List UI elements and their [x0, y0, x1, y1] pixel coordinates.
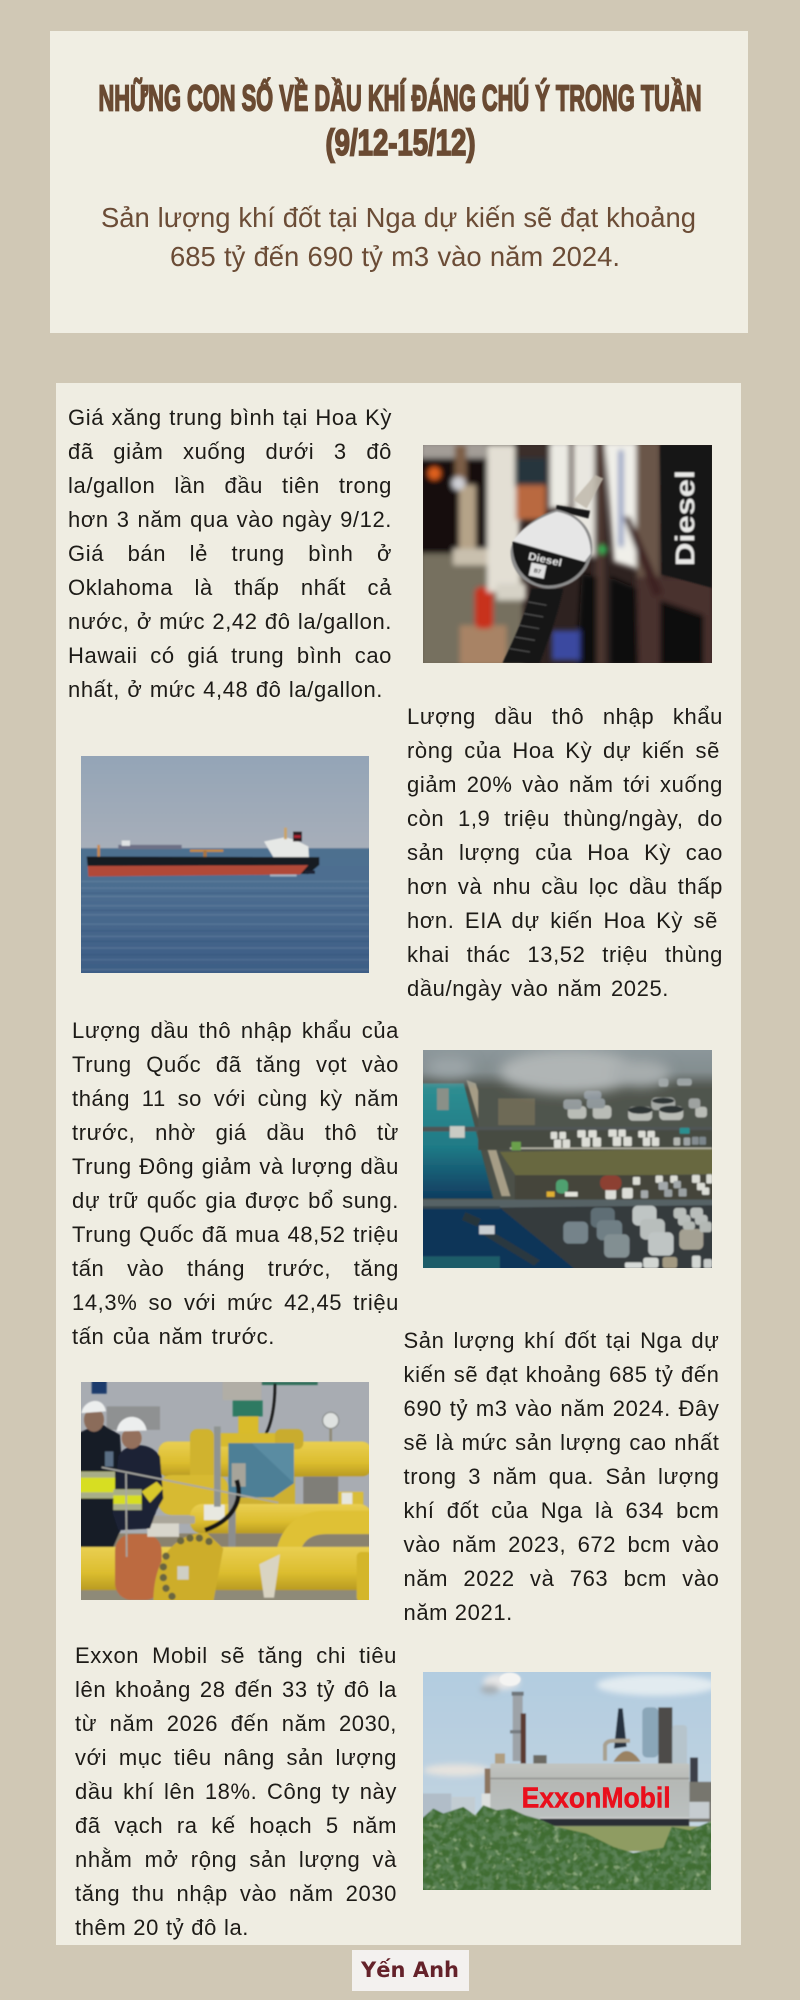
text block: Russia gas output: năm 2021.	[404, 1600, 513, 1625]
text block: Russia gas output: vào năm 2023, 672 bcm vào	[404, 1532, 720, 1557]
photo: diesel nozzle: Diesel	[670, 470, 700, 566]
photo: ExxonMobil refinery: ExxonMobil	[522, 1783, 671, 1815]
photo: diesel nozzle	[423, 445, 712, 663]
text block: Exxon Mobil spending: nhằm mở rộng sản lượng và	[75, 1847, 397, 1872]
text block: China crude imports: 14,3% so với mức 42,45 triệu	[72, 1290, 399, 1315]
text block: US crude imports: dầu/ngày vào năm 2025.	[407, 976, 669, 1001]
text block: Russia gas output: trong 3 năm qua. Sản lượng	[404, 1464, 720, 1489]
text block: Exxon Mobil spending: lên khoảng 28 đến 33 tỷ đô la	[75, 1677, 397, 1702]
text block: Russia gas output: 690 tỷ m3 vào năm 2024. Đây	[404, 1396, 720, 1421]
text block: US gasoline: hơn 3 năm qua vào ngày 9/12.	[68, 507, 392, 532]
text block: US gasoline: Giá bán lẻ trung bình ở	[68, 541, 392, 566]
text block: US crude imports: khai thác 13,52 triệu thùng	[407, 942, 723, 967]
text block: Exxon Mobil spending	[75, 1643, 397, 1940]
text block: US gasoline: đã giảm xuống dưới 3 đô	[68, 439, 392, 464]
photo: yellow gas pipes and workers	[81, 1382, 369, 1600]
text block: China crude imports: Trung Đông giảm và lượng dầu	[72, 1154, 399, 1179]
title: (9/12-15/12)	[326, 122, 476, 163]
text block: US gasoline: Hawaii có giá trung bình cao	[68, 643, 392, 668]
panel: main content	[56, 383, 741, 1945]
text block: China crude imports: Trung Quốc đã mua 48,52 triệu	[72, 1222, 399, 1247]
photo: diesel nozzle: B7	[533, 568, 541, 576]
text block: US gasoline: la/gallon lần đầu tiên trong	[68, 473, 392, 498]
text block: Exxon Mobil spending: đã vạch ra kế hoạch 5 năm	[75, 1813, 397, 1838]
text block: US crude imports	[407, 704, 723, 1001]
text block: Exxon Mobil spending: tăng thu nhập vào năm 2030	[75, 1881, 397, 1906]
text block: Russia gas output: Sản lượng khí đốt tại Nga dự	[404, 1328, 720, 1353]
text block: Russia gas output: kiến sẽ đạt khoảng 685 tỷ đến	[404, 1362, 720, 1387]
text block: US crude imports: hơn và nhu cầu lọc dầu thấp	[407, 874, 723, 899]
text block: Exxon Mobil spending: với mục tiêu nâng sản lượng	[75, 1745, 397, 1770]
text block: US gasoline: Giá xăng trung bình tại Hoa Kỳ	[68, 405, 392, 430]
text block: US gasoline: Oklahoma là thấp nhất cả	[68, 575, 392, 600]
text block: US crude imports: ròng của Hoa Kỳ dự kiến sẽ	[407, 738, 720, 763]
text block: China crude imports	[72, 1018, 399, 1349]
text block: US crude imports: giảm 20% vào năm tới xuống	[407, 772, 723, 797]
photo: oil tanker at sea	[81, 756, 369, 973]
text block: US gasoline: nhất, ở mức 4,48 đô la/gallon.	[68, 677, 383, 702]
author credit	[352, 1950, 469, 1991]
photo: diesel nozzle: Diesel	[527, 551, 563, 569]
text block: US gasoline	[68, 405, 392, 702]
text block: Russia gas output: sẽ là mức sản lượng cao nhất	[404, 1430, 720, 1455]
text block: Russia gas output: năm 2022 và 763 bcm vào	[404, 1566, 720, 1591]
text block: China crude imports: trước, nhờ giá dầu thô từ	[72, 1120, 399, 1145]
subtitle: Sản lượng khí đốt tại Nga dự kiến sẽ đạt khoảng	[101, 202, 696, 233]
text block: US gasoline: nước, ở mức 2,42 đô la/gallon.	[68, 609, 392, 634]
text block: Exxon Mobil spending: thêm 20 tỷ đô la.	[75, 1915, 249, 1940]
text block: US crude imports: Lượng dầu thô nhập khẩu	[407, 704, 723, 729]
subtitle: 685 tỷ đến 690 tỷ m3 vào năm 2024.	[170, 241, 620, 272]
text block: China crude imports: Lượng dầu thô nhập khẩu của	[72, 1018, 399, 1043]
photo: ExxonMobil refinery	[423, 1672, 711, 1890]
text block: China crude imports: tháng 11 so với cùng kỳ năm	[72, 1086, 399, 1111]
text block: Russia gas output: khí đốt của Nga là 634 bcm	[404, 1498, 720, 1523]
text block: China crude imports: tấn của năm trước.	[72, 1324, 275, 1349]
panel: header	[50, 31, 748, 333]
author credit: Yến Anh	[361, 1958, 459, 1982]
subtitle	[101, 202, 696, 272]
title	[98, 76, 702, 164]
text block: Exxon Mobil spending: Exxon Mobil sẽ tăng chi tiêu	[75, 1643, 397, 1668]
text block: China crude imports: Trung Quốc đã tăng vọt vào	[72, 1052, 399, 1077]
text block: US crude imports: còn 1,9 triệu thùng/ngày, do	[407, 806, 723, 831]
text block: China crude imports: tấn vào tháng trước, tăng	[72, 1256, 399, 1281]
text block: Exxon Mobil spending: dầu khí lên 18%. Công ty này	[75, 1779, 397, 1804]
text block: US crude imports: sản lượng của Hoa Kỳ cao	[407, 840, 723, 865]
text block: China crude imports: dự trữ quốc gia được bổ sung.	[72, 1188, 399, 1213]
text block: Exxon Mobil spending: từ năm 2026 đến năm 2030,	[75, 1711, 397, 1736]
photo: oil storage terminal	[423, 1050, 712, 1268]
text block: US crude imports: hơn. EIA dự kiến Hoa Kỳ sẽ	[407, 908, 718, 933]
text block: Russia gas output	[404, 1328, 720, 1625]
